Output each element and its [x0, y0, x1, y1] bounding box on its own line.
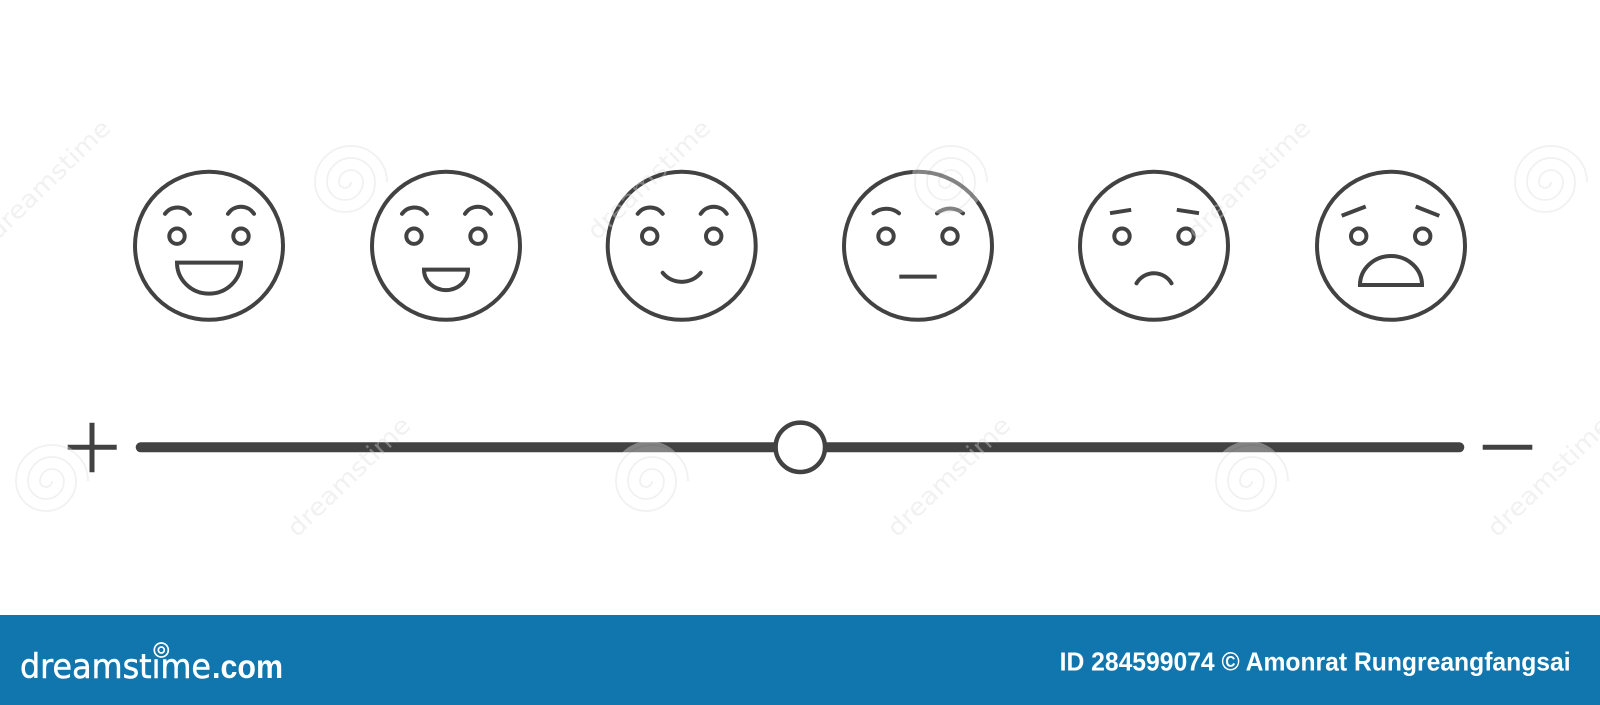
icon: sad face — [1080, 172, 1228, 320]
icon: happy face — [372, 172, 520, 320]
infographic canvas: dreamstime — [882, 411, 1016, 542]
icon: neutral face — [844, 172, 992, 320]
image credit: ID 284599074 © Amonrat Rungreangfangsai — [1060, 646, 1571, 676]
panel: rating slider — [68, 423, 1532, 472]
infographic canvas: dreamstime — [1182, 114, 1316, 245]
icon: very upset face — [1317, 172, 1465, 320]
slider track — [141, 442, 1459, 452]
icon: plus sign — [68, 423, 117, 472]
logo text: .com — [212, 648, 283, 685]
icon: very happy face — [135, 172, 283, 320]
icon: minus sign — [1483, 445, 1532, 450]
footer banner — [0, 615, 1600, 705]
logo text: dreamstime — [20, 647, 211, 687]
slider knob — [776, 423, 825, 472]
infographic canvas: dreamstime — [282, 411, 416, 542]
icon: smiling face — [608, 172, 756, 320]
panel: emoji rating faces — [135, 172, 1465, 320]
infographic canvas: dreamstime — [582, 114, 716, 245]
icon: logo spiral — [152, 641, 170, 659]
